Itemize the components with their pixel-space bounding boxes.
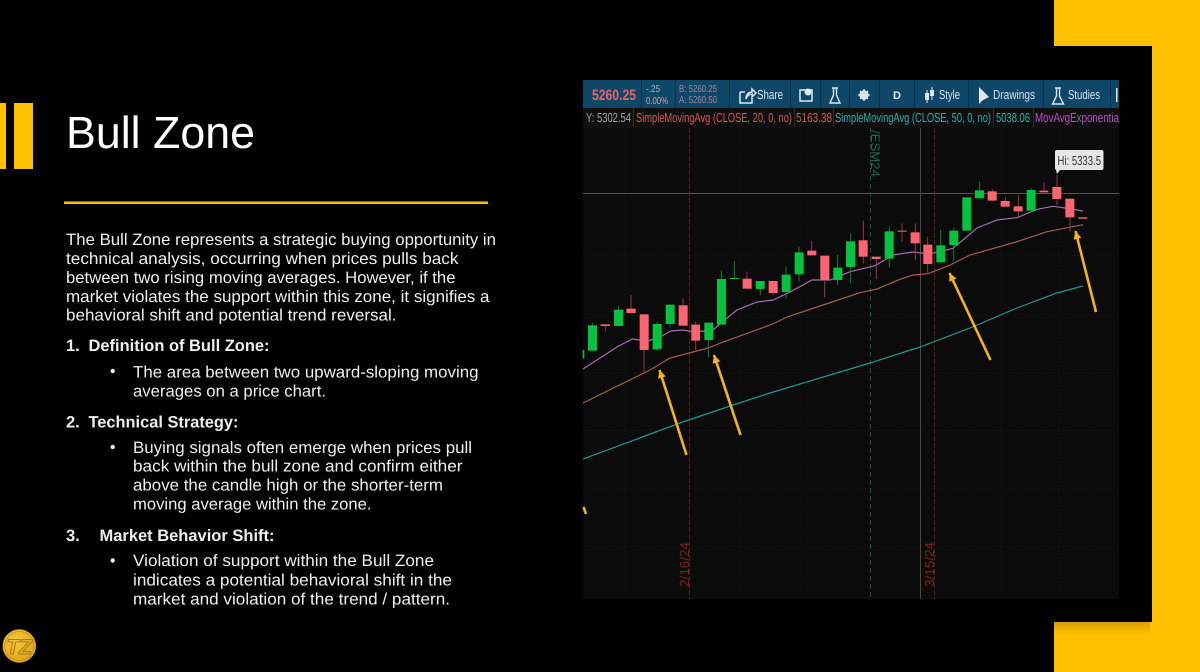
intro paragraph: technical analysis, occurring when prices pulls back [66, 250, 459, 268]
chart toolbar: B: 5260.25 [679, 84, 717, 95]
intro paragraph: market violates the support within this zone, it signifies a [66, 288, 490, 306]
panel: trading chart screenshot [583, 80, 1120, 599]
icon: gear [858, 89, 870, 101]
section 2: technical strategy: moving average within the zone. [133, 496, 372, 514]
section 2: technical strategy: Technical Strategy: [88, 414, 238, 432]
callout: high price label [1055, 150, 1104, 174]
section 3: market behavior shift [66, 527, 452, 608]
price chart plot area: 2/16/24 [677, 542, 692, 587]
intro paragraph: behavioral shift and potential trend reversal. [66, 306, 396, 324]
yellow frame: right-side band [1054, 0, 1200, 672]
chart toolbar: 0.00% [646, 96, 668, 107]
candlesticks [583, 233, 855, 372]
chart toolbar [583, 80, 1119, 108]
intro paragraph: The Bull Zone represents a strategic buying opportunity in [66, 231, 496, 249]
title: Bull Zone [66, 107, 255, 158]
title underline [64, 202, 488, 204]
icon: studies flask [1052, 88, 1064, 104]
price chart plot area: /ESM24 [868, 130, 882, 177]
section 3: market behavior shift: Market Behavior Shift: [100, 527, 274, 545]
icon: gold coin logo [3, 629, 36, 663]
section 3: market behavior shift: Violation of support within the Bull Zone [133, 552, 434, 570]
section 2: technical strategy [66, 414, 472, 514]
icon: share [740, 89, 756, 103]
study legend row: Y: 5302.54 [586, 110, 631, 125]
section 2: technical strategy: Buying signals often emerge when prices pull [133, 439, 472, 457]
icon: cursor [979, 87, 989, 104]
arrows: bull zone pullback entries [584, 231, 1096, 514]
chart toolbar: -.25 [646, 84, 660, 95]
study legend row: 5163.38 [796, 110, 832, 125]
study legend row [583, 108, 1120, 128]
shadow under chart on yellow band [1054, 622, 1150, 634]
intro paragraph [66, 231, 496, 324]
chart toolbar: Studies [1068, 87, 1100, 102]
section 2: technical strategy: back within the bull zone and confirm either [133, 458, 463, 476]
chart toolbar: 5260.25 [592, 87, 636, 104]
section 1: definition of bull zone: Definition of Bull Zone: [88, 337, 270, 355]
section 3: market behavior shift: market and violation of the trend / pattern. [133, 590, 450, 608]
icon: style candles [925, 87, 934, 103]
section 3: market behavior shift: indicates a potential behavioral shift in the [133, 572, 452, 590]
study legend row: SimpleMovingAvg (CLOSE, 50, 0, no) [835, 110, 991, 125]
icon: gold coin logo: TZ [6, 636, 33, 659]
chart toolbar: Drawings [993, 87, 1035, 102]
icon: flask [830, 88, 840, 103]
intro paragraph: between two rising moving averages. However, if the [66, 269, 455, 287]
price chart plot area [583, 128, 1119, 599]
section 1: definition of bull zone [66, 337, 478, 400]
section 1: definition of bull zone: The area between two upward-sloping moving [133, 364, 478, 382]
section 2: technical strategy: 2. [66, 414, 80, 432]
study legend row: SimpleMovingAvg (CLOSE, 20, 0, no) [636, 110, 792, 125]
chart toolbar: Style [939, 87, 960, 102]
chart toolbar: D [893, 90, 901, 102]
icon: calendar [800, 88, 812, 101]
chart toolbar: A: 5260.50 [679, 95, 717, 106]
price chart plot area: 3/15/24 [922, 542, 937, 587]
section 3: market behavior shift: 3. [66, 527, 80, 545]
chart toolbar: Share [757, 87, 783, 102]
section 1: definition of bull zone: averages on a price chart. [133, 382, 326, 400]
study legend row: MovAvgExponentia [1035, 110, 1120, 125]
accent bars beside title [0, 103, 33, 169]
study legend row: 5038.06 [996, 110, 1030, 125]
moving average lines [583, 206, 1083, 459]
callout: high price label: Hi: 5333.5 [1058, 153, 1101, 168]
section 1: definition of bull zone: 1. [66, 337, 80, 355]
section 2: technical strategy: above the candle high or the shorter-term [133, 476, 443, 494]
